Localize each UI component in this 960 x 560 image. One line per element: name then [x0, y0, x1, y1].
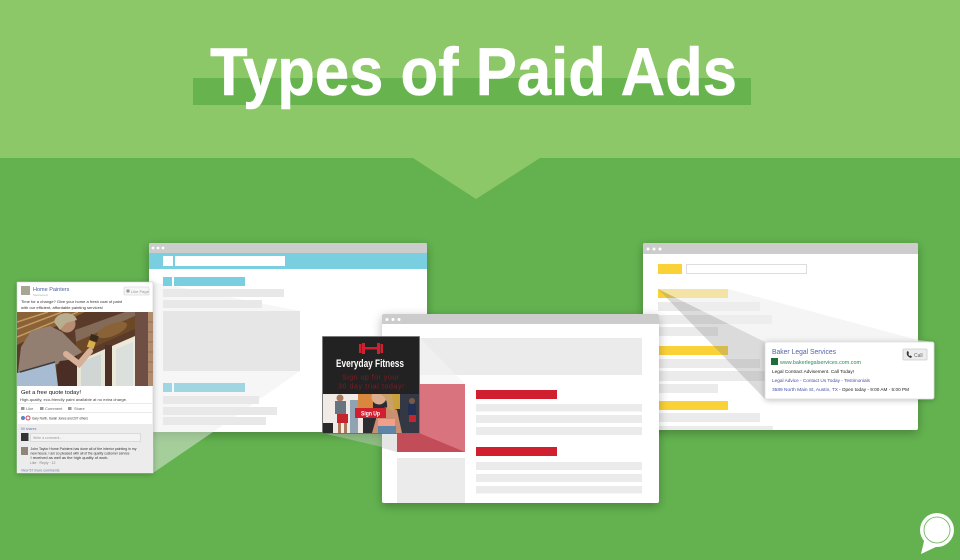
comments section: Write a comment... [33, 436, 62, 440]
browser window content: social feed [163, 277, 300, 425]
icon: speech pin logo [920, 513, 954, 554]
search ad callout: Baker Legal Services [772, 349, 836, 356]
title: Types of Paid Ads [210, 34, 737, 110]
header banner [0, 0, 960, 199]
comments section: John Taylor Home Painters has done all of the interior painting in my [30, 447, 137, 451]
social media ad: Home Painters [33, 287, 70, 293]
social media ad [17, 282, 153, 473]
icon: dumbbell [359, 343, 383, 354]
social media ad: Get a free quote today! [21, 390, 81, 396]
like page button [124, 287, 150, 295]
comments section: Like · Reply · 12 [30, 461, 56, 465]
display ad: Everyday Fitness: 30 day trial today! [338, 384, 404, 390]
connector: search ad to result [658, 289, 934, 399]
comments section: new house. I am so pleased with all of the quality customer service [30, 452, 130, 456]
display ad: Everyday Fitness: Sign up for your [342, 374, 400, 382]
page avatar [21, 286, 30, 295]
search ad callout: 3589 North Main St, Austin, TX [772, 387, 839, 392]
social media ad: Sponsored [33, 293, 48, 297]
social media ad: Like [26, 406, 34, 411]
connector: display ad to site [322, 337, 465, 452]
social media ad: with our efficient, affordable painting services! [21, 305, 103, 310]
social media ad: Comment [45, 406, 63, 411]
photo: gym class [323, 394, 419, 433]
display ad: Everyday Fitness [322, 336, 420, 434]
social media ad: Gary North, Sarah Jones and 207 others [32, 416, 88, 420]
sign up button: Sign Up [361, 412, 380, 418]
social media ad: Share [74, 406, 85, 411]
search ad callout: Legal Contract Advisement. Call Today! [772, 369, 854, 374]
browser window: display site [382, 314, 659, 503]
browser window frame: social feed [149, 243, 427, 432]
search ad callout: Legal Advice - Contact Us Today - Testimonials [772, 378, 871, 383]
comments section: I received as well as the high quality of work. [30, 456, 109, 460]
comments section [17, 424, 153, 473]
call button [903, 349, 927, 360]
connector: social ad to feed [153, 282, 300, 473]
comments section: View 57 more comments [21, 468, 60, 472]
photo: house painter [17, 312, 153, 386]
search ad callout [765, 342, 934, 399]
search ad callout: - Open today - 9:00 AM - 5:00 PM [839, 387, 909, 392]
display ad: Everyday Fitness: Everyday Fitness [336, 358, 404, 370]
comments section: 50 shares [21, 427, 37, 431]
browser window: search results [643, 243, 918, 430]
like page button: Like Page [131, 289, 150, 294]
social media ad: High-quality, eco-friendly paint available at no extra charge. [20, 397, 127, 402]
call button: Call [914, 353, 923, 359]
search ad callout: www.bakerlegalservices.com.com [779, 360, 861, 366]
social media ad: Time for a change? Give your home a fresh coat of paint [21, 299, 123, 304]
